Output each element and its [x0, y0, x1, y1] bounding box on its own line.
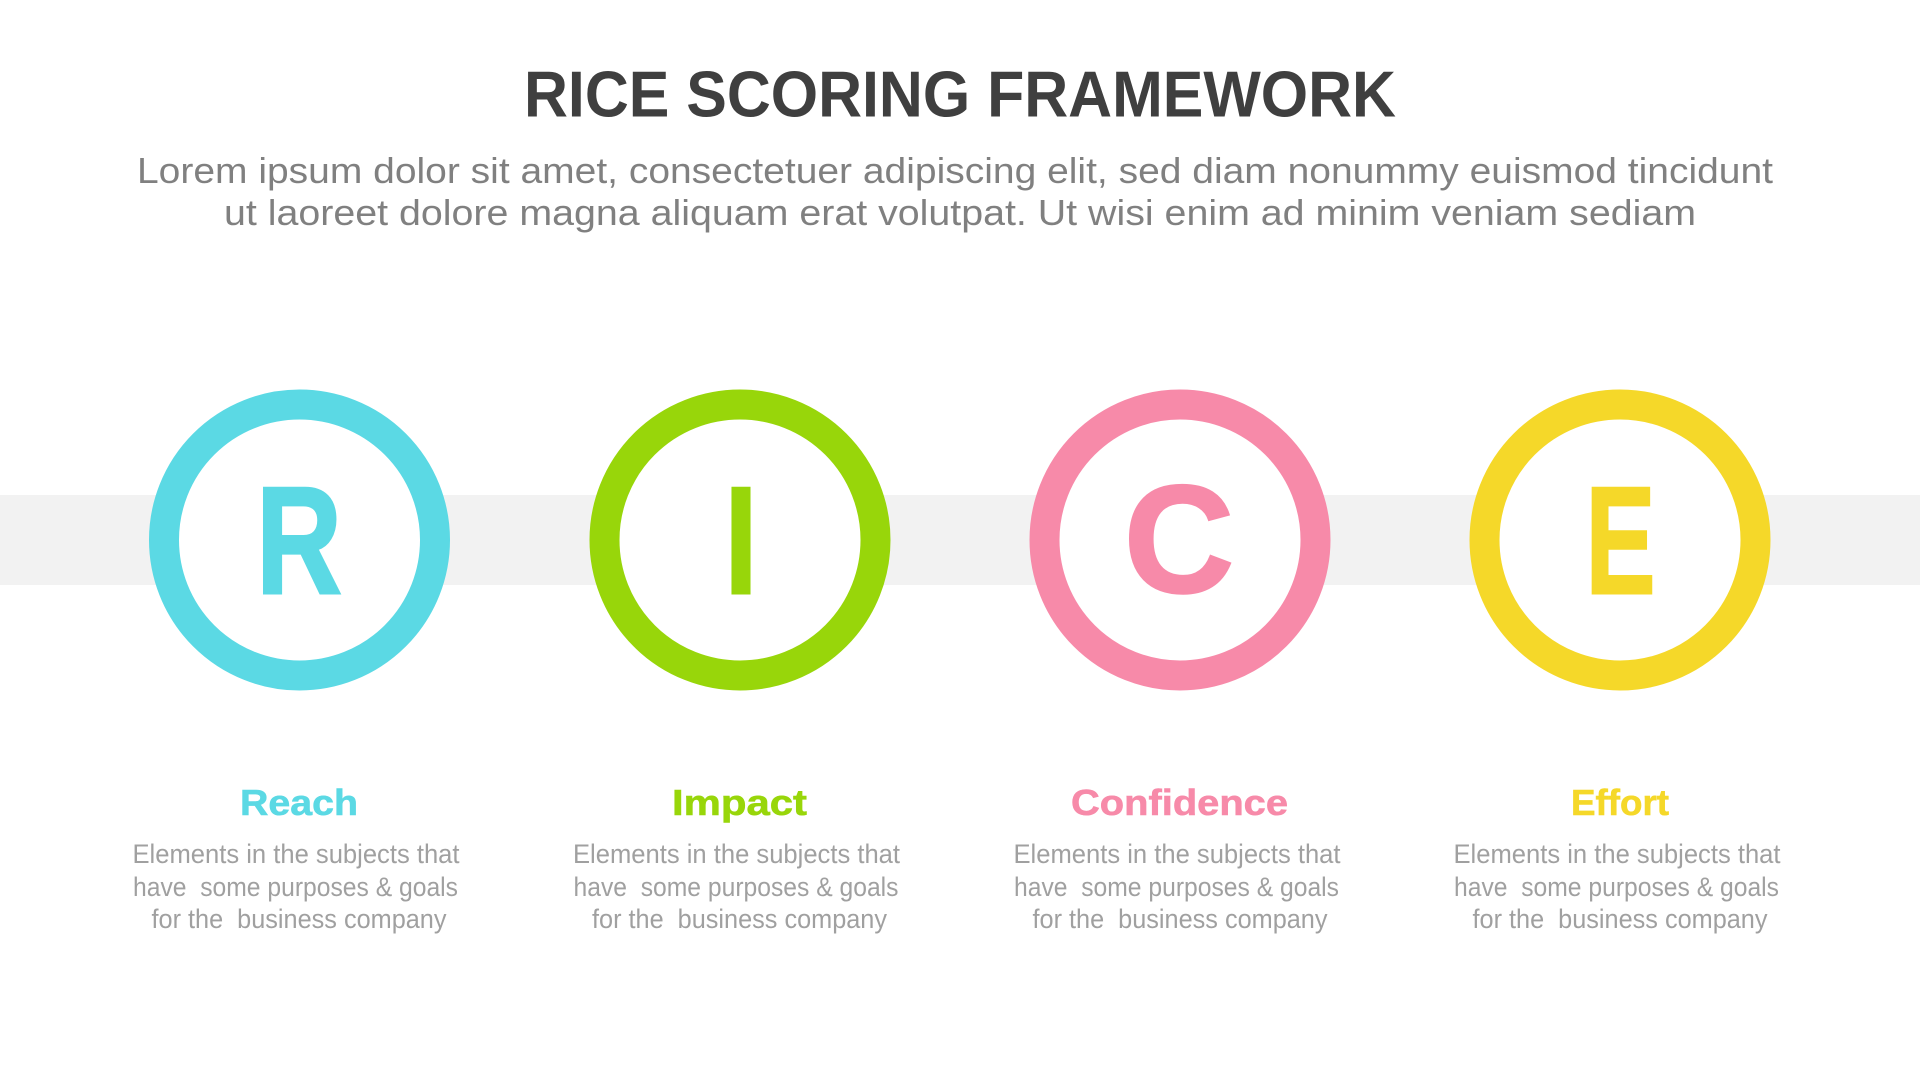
heading: reach: Reach — [240, 782, 358, 823]
description: reach: have some purposes & goals — [133, 872, 458, 902]
panel: reach — [132, 404, 460, 934]
heading: effort: Effort — [1571, 782, 1669, 823]
horizontal background band — [0, 495, 1920, 585]
icon: effort circle — [1484, 404, 1756, 676]
description: effort: have some purposes & goals — [1454, 872, 1779, 902]
subtitle text block — [137, 150, 1773, 233]
subtitle text block: Lorem ipsum dolor sit amet, consectetuer adipiscing elit, sed diam nonummy euismod tincidunt — [137, 150, 1773, 191]
icon: reach circle — [164, 404, 435, 676]
description: reach: for the business company — [152, 904, 447, 934]
description: impact: have some purposes & goals — [574, 872, 898, 902]
letter C: C — [1124, 454, 1234, 625]
description: effort: Elements in the subjects that — [1454, 839, 1781, 869]
description: effort: for the business company — [1472, 904, 1768, 934]
icon: impact circle — [604, 404, 876, 676]
description: impact: for the business company — [592, 904, 888, 934]
icon: confidence circle — [1044, 404, 1316, 676]
title: RICE SCORING FRAMEWORK — [524, 58, 1396, 130]
description: confidence — [1014, 839, 1341, 934]
description: confidence: have some purposes & goals — [1014, 872, 1339, 902]
description: reach — [132, 839, 460, 934]
heading: confidence: Confidence — [1071, 782, 1288, 823]
subtitle text block: ut laoreet dolore magna aliquam erat volutpat. Ut wisi enim ad minim veniam sediam — [224, 192, 1696, 233]
panel: effort — [1454, 404, 1781, 934]
letter I: I — [724, 455, 758, 626]
description: confidence: for the business company — [1032, 904, 1328, 934]
description: impact: Elements in the subjects that — [573, 839, 901, 869]
description: impact — [573, 839, 901, 934]
description: reach: Elements in the subjects that — [132, 839, 460, 869]
panel: impact — [573, 404, 901, 934]
letter R: R — [256, 455, 342, 626]
description: effort — [1454, 839, 1781, 934]
panel: confidence — [1014, 404, 1341, 934]
heading: impact: Impact — [672, 782, 807, 823]
description: confidence: Elements in the subjects that — [1014, 839, 1341, 869]
letter E: E — [1586, 455, 1656, 626]
